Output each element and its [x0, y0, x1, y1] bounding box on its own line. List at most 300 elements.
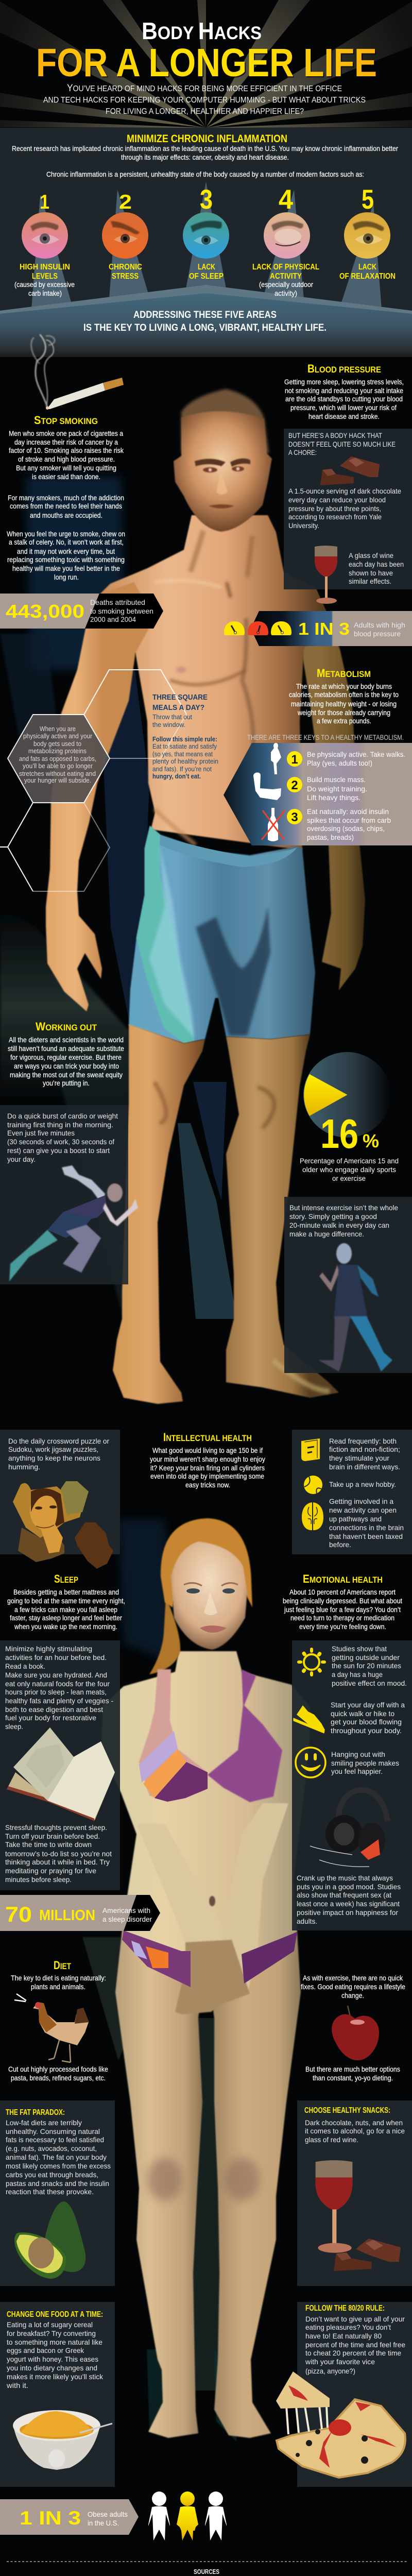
spotlight beams	[31, 182, 382, 309]
panel: fat paradox: reaction that these provoke.	[6, 2188, 94, 2196]
sleep heading and text	[7, 1572, 125, 1631]
blood pressure text block: heart disease and stroke.	[308, 412, 380, 420]
panel: sleep tips: both to ease digestion and best	[5, 1705, 103, 1714]
blood pressure text block	[284, 362, 404, 420]
left arm	[46, 582, 154, 1011]
panel: sleep tips: Stressful thoughts prevent sleep.	[5, 1823, 107, 1832]
icon: gauges	[224, 621, 291, 635]
panel: mood tips: Hanging out with	[331, 1750, 385, 1758]
woman facial details	[184, 1583, 238, 1633]
icon: walking figure	[271, 743, 281, 774]
working out text block: still haven’t found an adequate substitute	[8, 1044, 124, 1053]
intellectual health text block	[150, 1431, 265, 1489]
stat: 1 in 3 obese: 1 IN 3	[20, 2507, 81, 2529]
knee shading	[154, 1082, 330, 1391]
hexagon callout: proteins: your hunger will subside.	[24, 777, 91, 784]
panel: fat paradox	[0, 2100, 115, 2286]
diet heading and text	[8, 1959, 108, 2082]
panel: change one food: makes it more likely you’ll stick	[7, 2372, 104, 2381]
shorts shading	[196, 907, 270, 1036]
key text: Build muscle mass.	[307, 775, 366, 784]
panel: body hack chocolate and wine: every day can reduce your blood	[288, 496, 386, 504]
three square meals text: (so yes, that means eat	[152, 750, 213, 758]
panel: mood tips: positive impact on happiness for	[297, 1908, 398, 1917]
panel: change one food: CHANGE ONE FOOD AT A TIME:	[7, 2310, 103, 2319]
woman hair	[161, 1518, 252, 1607]
panel: chronic inflammation	[0, 128, 412, 357]
panel: change one food: to something more natural like	[7, 2338, 102, 2346]
panel: body hack chocolate and wine	[284, 429, 412, 589]
illustration: woman figure	[101, 1518, 310, 2438]
emotional health heading and text: EMOTIONAL HEALTH	[303, 1572, 383, 1585]
pie caption: Percentage of Americans 15 and	[300, 1157, 399, 1165]
panel: 80/20 rule: with your favorite vice	[305, 2358, 375, 2366]
working out text block: are ways you can trick your body into	[14, 1062, 119, 1070]
panel: brain tips: Getting involved in a	[329, 1497, 393, 1505]
key text: overdosing (sodas, chips,	[307, 824, 385, 833]
intellectual health text block: easy tricks now.	[185, 1481, 230, 1489]
title	[36, 18, 378, 86]
metabolism text block	[247, 667, 404, 741]
numbers: 2	[119, 191, 132, 213]
intro text: YOU’VE HEARD OF MIND HACKS FOR BEING MORE EFFICIENT IN THE OFFICE	[67, 83, 342, 94]
key text: Do weight training.	[307, 785, 367, 793]
panel: mood tips: Crank up the music that always	[297, 1874, 393, 1882]
intro paragraph: Chronic inflammation is a persistent, unhealthy state of the body caused by a number of modern factors such as:	[46, 170, 364, 178]
factor labels: LACK OF PHYSICAL	[252, 263, 319, 272]
factor labels: OF RELAXATION	[339, 272, 396, 281]
sources: SOURCES	[194, 2568, 219, 2575]
illustration: sprinter	[9, 1165, 138, 1281]
emotional health heading and text: About 10 percent of Americans report	[289, 1588, 396, 1596]
icon: eye 3	[183, 212, 229, 259]
icon: wine glass	[315, 546, 337, 604]
exercise and fixes text: change.	[341, 1991, 364, 1999]
metabolism text block: The rate at which your body burns	[296, 682, 392, 690]
woman forearms	[136, 1803, 288, 1994]
number badges: 3	[291, 810, 298, 824]
panel: fat paradox: fats is necessary to feel satisfied	[6, 2136, 104, 2144]
factor labels: LACK	[358, 263, 376, 272]
stop smoking text block: But any smoker will tell you quitting	[16, 464, 116, 472]
panel: brain tips	[292, 1430, 412, 1554]
key text: Eat naturally: avoid insulin	[307, 807, 389, 816]
stop smoking text block: When you feel the urge to smoke, chew on	[7, 530, 125, 538]
metabolism text block: a few extra pounds.	[317, 717, 371, 725]
panel: quick burst: rest) can give you a boost to start	[7, 1146, 110, 1155]
right leg	[226, 1035, 339, 1398]
intro text: AND TECH HACKS FOR KEEPING YOUR COMPUTER HUMMING - BUT WHAT ABOUT TRICKS	[43, 96, 366, 105]
panel: change one food	[0, 2302, 115, 2487]
bikini top right cup	[208, 1669, 282, 1802]
numbers: 3	[200, 184, 213, 215]
panel: change one food: with it.	[6, 2381, 28, 2389]
panel: 80/20 rule: have to! Eat naturally 80	[305, 2332, 382, 2340]
illustration: walker	[318, 1243, 392, 1371]
illustration: cereal bowl	[13, 2410, 112, 2470]
hair ponytail	[149, 1597, 180, 1674]
panel: brain tips: they stimulate your	[329, 1454, 389, 1462]
blood pressure text block: pressure, which will lower your risk of	[290, 403, 397, 412]
panel: 80/20 rule: eating pleasures? You don’t	[305, 2323, 391, 2331]
panel: change one food: Eating a lot of sugary cereal	[7, 2320, 93, 2329]
roof shape callout: ADDRESSING THESE FIVE AREAS	[133, 310, 277, 320]
panel: sleep tips: meditating or praying for five	[5, 1867, 96, 1875]
illustration: cigarette	[46, 378, 124, 410]
right arm	[301, 587, 365, 990]
panel: mood tips: quick walk or hike to	[331, 1709, 394, 1718]
sleep heading and text: when you wake up the next morning.	[14, 1622, 117, 1631]
panel: sleep tips: thinking about it while in bed. Try	[5, 1858, 110, 1866]
panel: fat paradox: animal fat). The fat on your body	[6, 2153, 107, 2161]
stop smoking text block: Men who smoke one pack of cigarettes a	[9, 429, 123, 437]
intellectual health text block: your mind weren’t sharp enough to enjoy	[150, 1455, 265, 1463]
icon: book	[301, 1438, 320, 1461]
hexagon outlines	[0, 670, 186, 891]
panel: mood tips: Studies show that	[332, 1645, 387, 1653]
stat: 1 in 3 high blood pressure: Adults with high	[354, 621, 405, 629]
hexagon callout: proteins: When you are	[40, 725, 76, 733]
stat: 443,000 deaths: to smoking between	[90, 607, 153, 615]
hexagon callout: proteins: metabolizing proteins	[28, 748, 87, 755]
stat: 1 in 3 high blood pressure: blood pressure	[354, 630, 401, 638]
woman torso and arms	[101, 1651, 310, 1973]
divider	[7, 2561, 407, 2562]
stat: 443,000 deaths: 443,000	[6, 601, 84, 622]
sleep heading and text: faster, stay asleep longer and feel better	[10, 1614, 122, 1622]
panel: mood tips: positive effect on mood.	[332, 1679, 407, 1687]
stat: 443,000 deaths	[0, 594, 163, 629]
stat: 1 in 3 obese: in the U.S.	[88, 2519, 119, 2527]
header sunburst rays	[0, 0, 412, 128]
illustration: headphones	[310, 1790, 387, 1867]
panel: healthy snacks	[297, 2100, 412, 2286]
key text: Lift heavy things.	[307, 793, 360, 802]
panel: mood tips: a day has a huge	[332, 1670, 383, 1679]
panel: brain tips: connections in the brain	[329, 1523, 404, 1532]
sleep heading and text: a few tricks can make you fall asleep	[14, 1605, 117, 1614]
key text	[307, 750, 405, 841]
metabolism text block: METABOLISM	[317, 667, 371, 680]
icon: sneaker	[294, 1705, 325, 1733]
sleep heading and text: SLEEP	[54, 1572, 78, 1585]
panel: 20 minute walk: But intense exercise isn’t the whole	[289, 1204, 398, 1212]
panel: mood tips: getting outside under	[332, 1653, 400, 1662]
panel: brain tips: new activity can open	[329, 1506, 397, 1514]
stat: 1 in 3 obese	[0, 2499, 139, 2535]
panel: sleep tips: tomorrow’s to-do list so you’re not	[5, 1850, 112, 1858]
exercise and fixes text: But there are much better options	[305, 2065, 400, 2073]
panel: sleep tips: healthy fats and plenty of veggies -	[5, 1697, 113, 1705]
factor labels: LACK	[198, 263, 215, 272]
pie caption	[300, 1157, 399, 1182]
numbers	[40, 184, 374, 215]
factor labels: ACTIVITY	[270, 272, 302, 281]
working out text block: for vigorous, regular exercise. But there	[10, 1053, 122, 1061]
stop smoking text block	[7, 414, 125, 581]
numbers: 5	[362, 184, 374, 215]
illustration: smoke	[31, 335, 55, 407]
intro paragraph: through its major effects: cancer, obesity and heart disease.	[121, 153, 289, 161]
factor labels: HIGH INSULIN	[20, 263, 70, 272]
hexagon callout: proteins	[8, 715, 110, 803]
panel: fat paradox: Low-fat diets are terribly	[6, 2119, 82, 2127]
panel: mood tips: Start your day off with a	[331, 1701, 405, 1709]
left leg	[113, 1024, 205, 1404]
head face	[174, 411, 272, 532]
diet heading and text: Cut out highly processed foods like	[8, 2065, 108, 2073]
panel: sleep tips: Read a book.	[5, 1662, 45, 1670]
hexagon callout: proteins: stretches without eating and	[19, 770, 96, 777]
key text: Play (yes, adults too!)	[307, 759, 372, 767]
panel: puzzles	[0, 1430, 120, 1554]
icon: sun	[297, 1648, 326, 1676]
metabolism text block: calories, metabolism often is the key to	[289, 690, 399, 699]
panel: three keys	[224, 743, 412, 845]
icon: brain	[302, 1502, 323, 1530]
bikini bottom	[122, 1930, 297, 1987]
blood pressure text block: BLOOD PRESSURE	[307, 362, 381, 375]
hexagon callout: proteins: body gets used to	[33, 740, 81, 748]
numbers: 4	[279, 184, 293, 215]
panel: quick burst: your day.	[7, 1155, 36, 1163]
stop smoking text block: comes from the need to feel their hands	[10, 502, 122, 510]
panel: quick burst: training first thing in the morning.	[7, 1121, 113, 1129]
number badges	[287, 751, 302, 824]
exercise and fixes text	[301, 1974, 405, 2082]
shorts	[129, 826, 315, 1043]
panel: brain tips: brain in different ways.	[329, 1463, 400, 1471]
panel: healthy snacks: it comes to alcohol, go for a nice	[305, 2127, 405, 2135]
panel: healthy snacks: glass of red wine.	[305, 2136, 358, 2144]
illustration: avocado	[14, 2201, 85, 2279]
factor labels	[14, 263, 396, 297]
panel: sleep tips: minutes before sleep.	[5, 1875, 72, 1884]
three square meals text: Follow this simple rule:	[152, 735, 217, 743]
stop smoking text block: a stalk of celery. No, it won’t work at first,	[9, 538, 124, 546]
stop smoking text block: of stroke and high blood pressure.	[18, 455, 115, 463]
stat: 1 in 3 high blood pressure	[224, 611, 412, 646]
panel: change one food: eggs and bacon or Greek	[7, 2346, 84, 2354]
intro paragraph	[12, 144, 398, 178]
panel: puzzles: Do the daily crossword puzzle or	[8, 1437, 109, 1445]
panel: body hack chocolate and wine: each day has been	[349, 560, 404, 568]
panel: change one food: for breakfast? Try converting	[7, 2329, 96, 2337]
icon: eye 4	[264, 212, 310, 259]
stop smoking text block: and it may not work every time, but	[17, 547, 115, 555]
panel: 80/20 rule: (pizza, anyone?)	[305, 2367, 355, 2375]
panel: fat paradox: (e.g. nuts, avocados, coconut,	[6, 2144, 97, 2153]
panel: sleep tips: Turn off your brain before bed.	[5, 1832, 100, 1840]
panel: body hack chocolate and wine: A 1.5-ounce serving of dark chocolate	[288, 487, 401, 495]
diet heading and text: The key to diet is eating naturally:	[11, 1974, 106, 1982]
intellectual health text block: even into old age by implementing some	[150, 1472, 264, 1480]
panel: puzzles: anything to keep the neurons	[8, 1454, 100, 1462]
panel: sleep tips: hours prior to sleep - lean meats,	[5, 1688, 107, 1696]
panel: puzzles: humming.	[8, 1463, 40, 1471]
panel: fat paradox: pastas and snacks and the insulin	[6, 2179, 109, 2188]
illustration: chicken	[14, 1994, 89, 2062]
working out text block	[8, 1020, 124, 1087]
three square meals text: Throw that out	[152, 713, 192, 721]
three square meals text: THREE SQUARE	[152, 693, 208, 702]
illustration: pizza	[276, 2371, 405, 2478]
stop smoking text block: long run.	[54, 573, 79, 581]
working out text block: you’re putting in.	[43, 1079, 90, 1087]
panel: 20 minute walk: story. Simply getting a good	[289, 1212, 377, 1221]
icon: flexed arm	[253, 772, 281, 800]
stat: 70 million	[0, 1895, 160, 1931]
icon: tennis ball	[304, 1476, 322, 1494]
icon: eye 2	[102, 212, 148, 259]
stop smoking text block: day increase their risk of cancer by a	[14, 438, 118, 446]
panel: sleep tips: eat only natural foods for the four	[5, 1680, 110, 1688]
panel: sleep tips: Make sure you are hydrated. And	[5, 1671, 107, 1679]
sleep heading and text: Besides getting a better mattress and	[13, 1588, 119, 1596]
panel: mood tips: puts you in a good mood. Studies	[297, 1883, 401, 1891]
emotional health heading and text: need to turn to therapy or medication	[290, 1614, 394, 1622]
panel: mood tips: get your blood flowing	[331, 1718, 402, 1726]
panel: fat paradox: carbs you eat through breads,	[6, 2171, 98, 2179]
panel: brain tips: up pathways and	[329, 1515, 382, 1523]
panel: body hack chocolate and wine: A CHORE:	[288, 448, 317, 456]
face details	[195, 459, 250, 509]
panel: 80/20 rule: to cheat 20 percent of the time	[305, 2349, 401, 2357]
stat: 70 million: 70	[5, 1902, 32, 1926]
numbers: 1	[40, 191, 49, 213]
woman right leg	[206, 1932, 301, 2438]
diet heading and text: pasta, breads, refined sugars, etc.	[11, 2074, 106, 2082]
three square meals text: and fats). If you’re not	[152, 765, 212, 773]
chart: 16 percent pie: 16	[320, 1111, 358, 1157]
stop smoking text block: replacing something toxic with something	[7, 555, 125, 564]
stat: 70 million: Americans with	[102, 1906, 150, 1914]
panel: sleep tips: fuel your body for restorative	[5, 1714, 96, 1722]
chart: 16 percent pie	[303, 1052, 391, 1157]
stat: 443,000 deaths: Deaths attributed	[90, 598, 145, 606]
emotional health heading and text	[283, 1572, 402, 1631]
intellectual health text block: INTELLECTUAL HEALTH	[163, 1431, 252, 1444]
three square meals text: plenty of healthy protein	[152, 757, 218, 765]
hexagon callout: proteins: and fats as opposed to carbs,	[19, 755, 96, 762]
panel: puzzles: Sudoku, work jigsaw puzzles,	[8, 1445, 98, 1453]
stat: 1 in 3 high blood pressure: 1 IN 3	[298, 619, 350, 638]
shorts stripe teal	[136, 826, 195, 1043]
panel: mood tips: throughout your body.	[331, 1726, 402, 1735]
icon: smiley	[296, 1748, 325, 1777]
intro text: FOR LIVING A LONGER, HEALTHIER AND HAPPIER LIFE?	[106, 107, 304, 116]
panel: quick burst: Do a quick burst of cardio or weight	[7, 1112, 118, 1120]
panel: mood tips: adults.	[297, 1917, 317, 1925]
panel: mood tips: smiling people makes	[331, 1759, 399, 1767]
key text: pastas, breads)	[307, 833, 354, 841]
working out text block: WORKING OUT	[36, 1020, 97, 1033]
stat: 1 in 3 obese: Obese adults	[88, 2510, 128, 2518]
bikini top left cup	[139, 1669, 208, 1802]
title: BODY HACKS	[142, 18, 262, 44]
illustration: mona lisa puzzle	[13, 1481, 113, 1569]
factor labels: LEVELS	[32, 272, 58, 281]
illustration: wine and chocolate	[316, 2160, 401, 2271]
sources	[151, 2568, 262, 2576]
illustration: man figure	[46, 389, 365, 1404]
woman hands	[175, 1940, 250, 2014]
panel: healthy snacks: Dark chocolate, nuts, and when	[305, 2119, 403, 2127]
panel: sleep tips: activities for an hour before bed.	[5, 1653, 107, 1662]
background textures	[0, 477, 237, 2442]
panel: 20 minute walk: make a huge difference.	[289, 1230, 364, 1238]
icon: eye 5	[344, 212, 390, 259]
roof shape callout	[0, 285, 412, 357]
sleep heading and text: going to bed at the same time every night,	[7, 1597, 125, 1605]
panel: fat paradox: unhealthy. Consuming natural	[6, 2127, 100, 2136]
intellectual health text block: it? Keep your brain firing on all cylinders	[150, 1464, 265, 1472]
factor labels: OF SLEEP	[189, 272, 224, 281]
heading: minimize chronic inflammation: MINIMIZE CHRONIC INFLAMMATION	[127, 133, 287, 145]
panel: quick burst: (30 seconds of work, 30 seconds of	[7, 1138, 114, 1146]
knees	[147, 2158, 260, 2201]
chart: 16 percent pie: %	[363, 1130, 379, 1151]
three square meals text	[152, 693, 218, 780]
number badges: 2	[291, 778, 298, 792]
panel: brain tips: Take up a new hobby.	[329, 1480, 396, 1488]
exercise and fixes text: than constant, yo-yo dieting.	[313, 2074, 393, 2082]
waistband	[160, 836, 297, 867]
panel: sleep tips	[0, 1640, 120, 1890]
chest shading	[154, 531, 253, 845]
stop smoking text block: STOP SMOKING	[34, 414, 98, 427]
stop smoking text block: and mouths are occupied.	[30, 511, 102, 519]
illustration: open book	[7, 1727, 115, 1821]
key text: spikes that occur from carb	[307, 816, 391, 824]
panel: 80/20 rule: percent of the time and feel free	[305, 2341, 405, 2349]
stat: 70 million: MILLION	[39, 1907, 95, 1924]
panel: mood tips	[292, 1640, 412, 1930]
pie caption: or exercise	[332, 1174, 366, 1182]
number badges: 1	[291, 753, 298, 767]
working out text block: making the most out of the sweat equity	[10, 1071, 123, 1079]
panel: quick burst	[0, 1105, 128, 1284]
shorts highlight	[149, 845, 195, 1038]
panel: change one food: yogurt with honey. This eases	[7, 2355, 98, 2363]
icon: eye 1	[22, 212, 68, 259]
panel: sleep tips: sleep.	[5, 1722, 23, 1731]
intro text	[43, 83, 366, 116]
stat: 443,000 deaths: 2000 and 2004	[90, 615, 136, 623]
panel: mood tips: the sun for 20 minutes	[332, 1662, 401, 1670]
diet heading and text: plants and animals.	[31, 1982, 85, 1991]
panel: body hack chocolate and wine: A glass of wine	[349, 551, 393, 560]
three square meals text: MEALS A DAY?	[152, 703, 204, 712]
panel: mood tips: also show that frequent sex (at	[297, 1891, 391, 1899]
panel: body hack chocolate and wine: similar effects.	[349, 577, 391, 585]
stop smoking text block: For many smokers, much of the addiction	[8, 494, 124, 502]
icon: chocolate	[320, 456, 380, 485]
panel: body hack chocolate and wine: according to research from Yale	[288, 513, 382, 521]
factor labels: STRESS	[112, 272, 139, 281]
factor labels: (especially outdoor	[259, 280, 313, 289]
working out text block: All the dieters and scientists in the world	[9, 1036, 124, 1044]
panel: mood tips: least once a week) has significant	[297, 1900, 400, 1908]
panel: sleep tips: Take the time to write down	[5, 1840, 92, 1849]
panel: 80/20 rule	[297, 2302, 412, 2487]
panel: body hack chocolate and wine: BUT HERE’S A BODY HACK THAT	[288, 431, 382, 439]
stop smoking text block: factor of 10. Smoking also raises the risk	[9, 446, 124, 454]
factor labels: CHRONIC	[109, 263, 142, 272]
stat: 70 million: a sleep disorder	[102, 1915, 152, 1923]
roof shape callout: IS THE KEY TO LIVING A LONG, VIBRANT, HEALTHY LIFE.	[83, 323, 327, 333]
panel: brain tips: fiction and non-fiction;	[329, 1445, 400, 1453]
